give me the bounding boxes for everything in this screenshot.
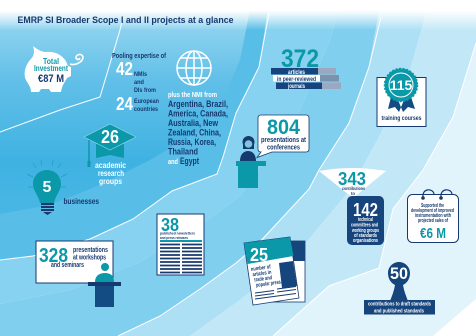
partner countries text block: Egypt bbox=[180, 156, 199, 166]
academic research groups: groups bbox=[99, 177, 122, 186]
pooling expertise text block: and bbox=[134, 79, 144, 86]
115 training courses certificate: training courses bbox=[382, 115, 422, 122]
academic research groups bbox=[84, 124, 136, 186]
businesses bbox=[27, 160, 99, 215]
804 conference presentations: conferences bbox=[267, 144, 300, 152]
board: 328 presentations: at workshops bbox=[73, 254, 106, 262]
115 training courses certificate bbox=[377, 68, 426, 126]
pooling expertise text block: DIs from bbox=[134, 87, 156, 94]
50 contributions to standards: and published standards bbox=[374, 308, 424, 314]
372 journal articles: journals bbox=[287, 84, 305, 90]
25 trade press newspaper bbox=[244, 237, 305, 305]
partner countries text block: and bbox=[168, 159, 178, 166]
piggy bank: total investment: €87 M bbox=[38, 73, 64, 85]
piggy bank: total investment bbox=[25, 46, 83, 92]
372 journal articles: 372 bbox=[281, 45, 319, 73]
board: 328 presentations: 328 bbox=[39, 245, 68, 267]
icon: light bulb bbox=[27, 160, 67, 187]
343 contributions funnel: 343 bbox=[338, 169, 366, 189]
pooling expertise text block: Pooling expertise of bbox=[112, 53, 167, 60]
icon: globe bbox=[177, 51, 211, 85]
icon: rosette: 115 bbox=[390, 77, 413, 93]
newsletters document: and press releases bbox=[160, 236, 188, 240]
icon: graduation cap bbox=[96, 144, 124, 158]
partner countries text block: plus the NMI from bbox=[168, 92, 217, 99]
title: EMRP SI Broader Scope I and II projects at a glance bbox=[18, 15, 234, 25]
icon: speaker at podium bbox=[88, 263, 121, 307]
25 trade press newspaper: 25 bbox=[250, 245, 268, 265]
25 trade press newspaper: number of bbox=[250, 264, 271, 273]
pooling expertise text block: countries bbox=[134, 106, 158, 113]
newsletters document: 38 bbox=[161, 215, 179, 235]
6 M projected sales calendar bbox=[408, 190, 458, 242]
142 technical committees: 142 bbox=[353, 200, 378, 220]
board: 328 presentations: presentations bbox=[73, 247, 108, 254]
businesses: 5 bbox=[43, 179, 52, 196]
50 contributions to standards: 50 bbox=[390, 264, 408, 283]
pooling expertise text block: NMIs bbox=[134, 71, 147, 78]
partner countries text block: Thailand bbox=[168, 146, 198, 156]
142 technical committees: of standards bbox=[354, 233, 377, 239]
partner countries text block: Zealand, China, bbox=[168, 128, 221, 138]
businesses: businesses bbox=[64, 197, 99, 206]
partner countries text block: Russia, Korea, bbox=[168, 137, 216, 147]
newsletters document: published newsletters bbox=[160, 232, 195, 236]
partner countries text block bbox=[168, 92, 228, 166]
board: 328 presentations: and seminars bbox=[51, 262, 84, 269]
804 conference presentations bbox=[236, 115, 309, 188]
academic research groups: 26 bbox=[101, 127, 119, 147]
142 technical committees: organisations bbox=[353, 238, 378, 244]
6 M projected sales calendar: Supported the bbox=[421, 203, 444, 209]
piggy bank: total investment: Investment bbox=[34, 64, 68, 73]
50 contributions to standards: contributions to draft standards bbox=[368, 302, 431, 308]
pooling expertise text block bbox=[112, 53, 167, 114]
804 conference presentations: 804 bbox=[267, 116, 300, 139]
343 contributions funnel bbox=[319, 168, 386, 198]
372 journal articles: articles bbox=[288, 70, 306, 76]
academic research groups: academic bbox=[95, 161, 126, 170]
6 M projected sales calendar: projected sales of bbox=[418, 218, 448, 224]
icon: woman at podium bbox=[236, 136, 266, 188]
6 M projected sales calendar: development of improved bbox=[411, 208, 454, 214]
6 M projected sales calendar: instrumentation with bbox=[415, 213, 451, 219]
pooling expertise text block: 24 bbox=[116, 94, 133, 114]
academic research groups: research bbox=[98, 169, 124, 178]
142 technical committees: working groups bbox=[351, 228, 379, 234]
piggy bank: total investment: Total bbox=[43, 57, 59, 66]
142 technical committees: committees and bbox=[351, 222, 378, 228]
partner countries text block: America, Canada, bbox=[168, 108, 228, 118]
372 journal articles: in peer-reviewed bbox=[277, 77, 316, 83]
343 contributions funnel: contributions bbox=[342, 186, 365, 191]
pooling expertise text block: 42 bbox=[116, 59, 133, 79]
343 contributions funnel: to bbox=[351, 191, 355, 196]
speech bubble bbox=[257, 115, 309, 158]
6 M projected sales calendar: €6 M bbox=[420, 225, 446, 242]
icon: head silhouette bbox=[388, 262, 410, 301]
icon: piggy bank bbox=[25, 46, 71, 92]
newsletters document bbox=[157, 214, 204, 275]
25 trade press newspaper: popular press. bbox=[256, 279, 283, 289]
partner countries text block: Argentina, Brazil, bbox=[168, 99, 228, 109]
372 journal articles bbox=[271, 45, 341, 90]
142 technical committees bbox=[347, 196, 384, 245]
142 technical committees: technical bbox=[358, 217, 373, 223]
804 conference presentations: presentations at bbox=[261, 137, 307, 144]
board: 328 presentations bbox=[36, 241, 121, 307]
25 trade press newspaper: articles in bbox=[252, 270, 272, 278]
25 trade press newspaper: trade and bbox=[254, 275, 273, 284]
pooling expertise text block: European bbox=[134, 98, 159, 105]
partner countries text block: Australia, New bbox=[168, 118, 219, 128]
50 contributions to standards bbox=[364, 262, 435, 314]
